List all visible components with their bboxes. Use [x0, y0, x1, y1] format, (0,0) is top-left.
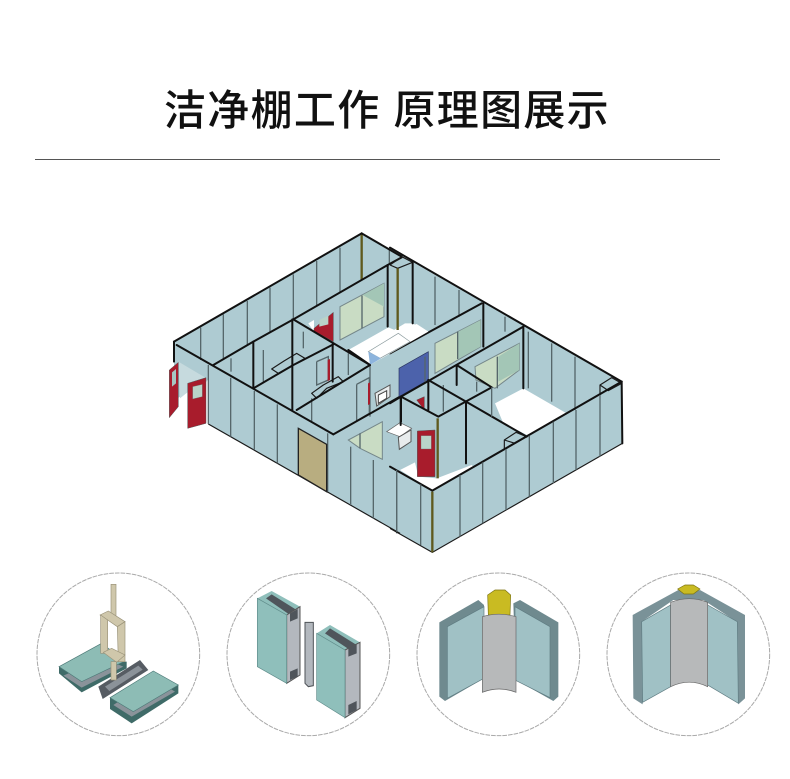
- joint profile: [305, 622, 313, 687]
- corner closets: [504, 378, 622, 449]
- window: rear room: [340, 283, 384, 340]
- blue panel: [399, 352, 428, 397]
- yellow corner post: [678, 585, 700, 594]
- small internal closets: [231, 332, 370, 422]
- left panel: [439, 600, 484, 701]
- lifting frame: [100, 584, 125, 680]
- beige door: [298, 428, 327, 492]
- detail circle 4: inner corner: [607, 573, 770, 736]
- title divider: [35, 159, 720, 160]
- isometric cleanroom plan: [169, 233, 622, 552]
- left panel: [642, 605, 671, 702]
- title: 洁净棚工作 原理图展示: [164, 87, 610, 134]
- curved cover: [671, 599, 708, 687]
- top frame: [633, 590, 745, 704]
- right half details: [390, 248, 622, 552]
- window: centre room: [435, 320, 481, 373]
- machine upper: [375, 385, 390, 406]
- left half details: [169, 233, 402, 533]
- right panel: [708, 605, 738, 703]
- small red door: [308, 312, 333, 342]
- red door: front room: [417, 430, 435, 477]
- red door: open right: [188, 378, 206, 428]
- left panel: [257, 591, 300, 683]
- machine lower: [387, 423, 412, 449]
- detail circle 1: panel assembly: [37, 573, 200, 736]
- panels and rail: [59, 643, 178, 723]
- detail circle 3: outer corner: [417, 573, 580, 736]
- right panel: [317, 625, 360, 718]
- window: right room: [475, 343, 519, 388]
- wall base silhouette: [174, 233, 622, 552]
- right panel: [513, 600, 558, 701]
- red door: open left: [169, 362, 178, 418]
- centre room details: [348, 324, 428, 449]
- detail circle 2: panel joint: [227, 573, 390, 736]
- yellow corner post: [488, 590, 511, 615]
- curved cover: [482, 614, 516, 692]
